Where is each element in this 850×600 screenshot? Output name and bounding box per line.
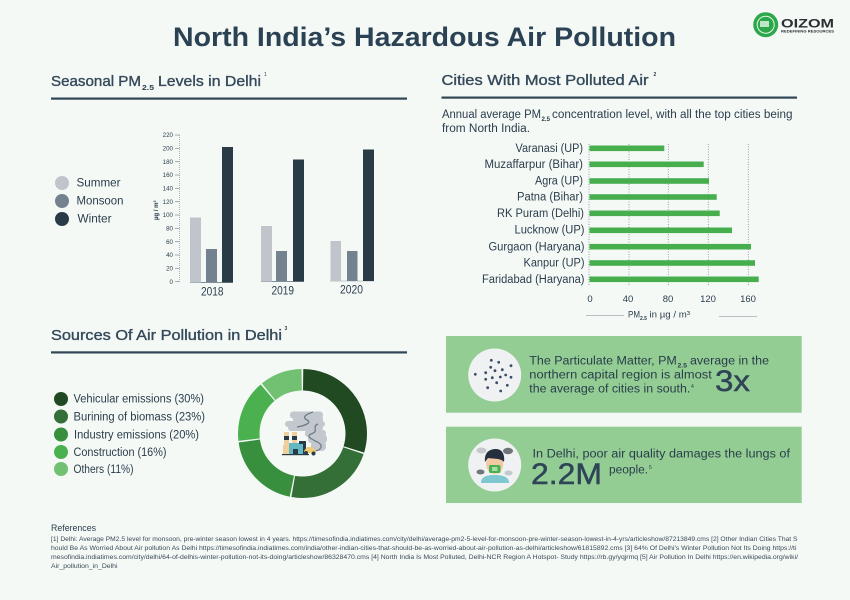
bar chart: cities: Faridabad (Haryana) xyxy=(482,274,585,286)
legend: seasons xyxy=(55,176,124,226)
text block: particulate matter: northern capital region is almost xyxy=(529,370,713,382)
bar chart: seasonal PM2.5: 60 xyxy=(166,239,174,246)
bar chart: cities: 2.5 xyxy=(640,316,647,322)
legend: sources: Vehicular emissions (30%) xyxy=(74,394,204,406)
heading: sources: 3 xyxy=(284,326,288,332)
references: mesofindia.indiatimes.com/city/delhi/64-of-delhis-winter-pollution-not-its-doing/articleshow/86328470.cms [4] North India Is Most Polluted, Delhi-NCR Region A Hotspot- Study https://rb.gy/yqjrmq [5] Air Pollution In Delhi https://en.wikipedia.org/wiki/ xyxy=(51,554,798,561)
heading: seasonal levels xyxy=(51,72,407,100)
bar chart: cities: 80 xyxy=(663,294,673,305)
logo: Oizom: REDEFINING RESOURCES xyxy=(781,30,834,34)
text block: annual average note: from North India. xyxy=(442,123,530,135)
panel: 3x callout xyxy=(446,336,802,413)
icon: particulate matter xyxy=(468,348,521,402)
text block: particulate matter: The Particulate Matter, PM xyxy=(529,356,677,368)
bar chart: cities: in µg / m³ xyxy=(650,310,690,320)
bar chart: cities: Varanasi (UP) xyxy=(516,143,583,155)
bar chart: cities: 0 xyxy=(587,294,593,305)
text block: particulate matter: the average of cities in south. xyxy=(529,384,690,396)
references xyxy=(51,523,798,570)
text block: particulate matter: average in the xyxy=(690,356,769,368)
bar chart: seasonal PM2.5: 40 xyxy=(166,252,174,259)
panel: 2.2M callout xyxy=(446,427,802,503)
heading: seasonal levels: 2.5 xyxy=(142,83,154,92)
stat: 3x: 3x xyxy=(715,365,750,398)
references: [1] Delhi: Average PM2.5 level for monsoon, pre-winter season lowest in 4 years. https://timesofindia.indiatimes.com/city/delhi/average-pm2-5-level-for-monsoon-pre-winter-season-lowest-in-4-yrs/articleshow/87213849.cms [2] Other Indian Cities That S xyxy=(51,536,798,543)
bar chart: cities: RK Puram (Delhi) xyxy=(497,208,584,220)
bar chart: cities: Lucknow (UP) xyxy=(514,224,585,236)
text block: particulate matter: 4 xyxy=(691,384,694,390)
text block: annual average note: 2.5 xyxy=(542,117,551,123)
bar chart: cities: 40 xyxy=(623,294,633,305)
bar chart: seasonal PM2.5: 160 xyxy=(163,172,174,179)
legend: seasons: Monsoon xyxy=(76,196,124,208)
legend: seasons: Summer xyxy=(76,178,121,190)
bar chart: seasonal PM2.5: µg / m³ xyxy=(153,201,160,220)
bar chart: seasonal PM2.5: 200 xyxy=(163,146,174,152)
bar chart: cities xyxy=(482,143,759,322)
heading: seasonal levels: Levels in Delhi xyxy=(158,74,261,90)
bar chart: cities: Patna (Bihar) xyxy=(517,192,583,204)
bar chart: cities: Agra (UP) xyxy=(535,176,583,188)
legend: sources: Others (11%) xyxy=(74,464,134,476)
bar chart: seasonal PM2.5: 180 xyxy=(163,159,174,166)
bar chart: cities: PM xyxy=(628,310,640,320)
references: Air_pollution_in_Delhi xyxy=(51,563,118,570)
bar chart: seasonal PM2.5 xyxy=(153,132,374,298)
bar chart: cities: Muzaffarpur (Bihar) xyxy=(484,159,583,171)
text block: particulate matter xyxy=(529,356,769,396)
donut chart: sources xyxy=(249,380,356,487)
text block: lungs: people. xyxy=(609,464,648,476)
bar chart: cities: Gurgaon (Haryana) xyxy=(488,242,585,254)
bar chart: seasonal PM2.5: 2020 xyxy=(340,284,363,296)
heading: sources xyxy=(51,326,407,354)
legend: sources: Burining of biomass (23%) xyxy=(74,412,205,424)
references: hould Be As Worried About Air pollution As Delhi https://timesofindia.indiatimes.com/india/other-indian-cities-that-should-be-as-worried-about-air-pollution-as-delhi/articleshow/61815892.cms [3] 64% Of Delhi's Winter Pollution Not Its Doing https://ti xyxy=(51,545,797,552)
legend: sources: Construction (16%) xyxy=(74,447,167,459)
heading: polluted cities: 2 xyxy=(654,72,656,78)
bar chart: seasonal PM2.5: 2019 xyxy=(272,286,294,298)
heading: polluted cities xyxy=(442,72,797,99)
heading: polluted cities: Cities With Most Polluted Air xyxy=(442,73,649,89)
legend: sources: Industry emissions (20%) xyxy=(74,430,199,442)
bar chart: seasonal PM2.5: 220 xyxy=(163,132,174,139)
references: References xyxy=(51,523,96,533)
heading: seasonal levels: 1 xyxy=(264,72,267,78)
legend: seasons: Winter xyxy=(78,214,112,226)
bar chart: cities: 120 xyxy=(700,294,716,305)
text block: annual average note xyxy=(442,109,792,135)
icon: person with mask xyxy=(468,438,521,492)
text block: lungs: 5 xyxy=(649,465,652,471)
stat: 2.2M: 2.2M xyxy=(531,458,602,491)
text block: lungs xyxy=(532,448,791,476)
bar chart: cities: Kanpur (UP) xyxy=(524,258,585,270)
bar chart: seasonal PM2.5: 120 xyxy=(163,199,174,206)
title: North India’s Hazardous Air Pollution xyxy=(173,22,676,52)
heading: seasonal levels: Seasonal PM xyxy=(51,74,141,90)
bar chart: seasonal PM2.5: 0 xyxy=(170,279,174,286)
icon: factory and smoke xyxy=(282,412,327,456)
text block: annual average note: concentration level, with all the top cities being xyxy=(552,109,792,121)
text block: annual average note: Annual average PM xyxy=(442,109,541,121)
text block: lungs: In Delhi, poor air quality damages the lungs of xyxy=(532,448,791,460)
bar chart: seasonal PM2.5: 140 xyxy=(163,186,174,192)
legend: sources xyxy=(54,392,205,476)
bar chart: seasonal PM2.5: 20 xyxy=(166,266,174,272)
bar chart: cities: 160 xyxy=(740,294,756,305)
bar chart: seasonal PM2.5: 2018 xyxy=(201,286,224,298)
bar chart: seasonal PM2.5: 80 xyxy=(166,226,174,232)
logo: Oizom xyxy=(753,12,834,37)
bar chart: seasonal PM2.5: 100 xyxy=(163,212,174,219)
heading: sources: Sources Of Air Pollution in Delhi xyxy=(51,328,282,344)
text block: particulate matter: 2.5 xyxy=(678,364,688,370)
logo: Oizom: OIZOM xyxy=(781,16,834,30)
